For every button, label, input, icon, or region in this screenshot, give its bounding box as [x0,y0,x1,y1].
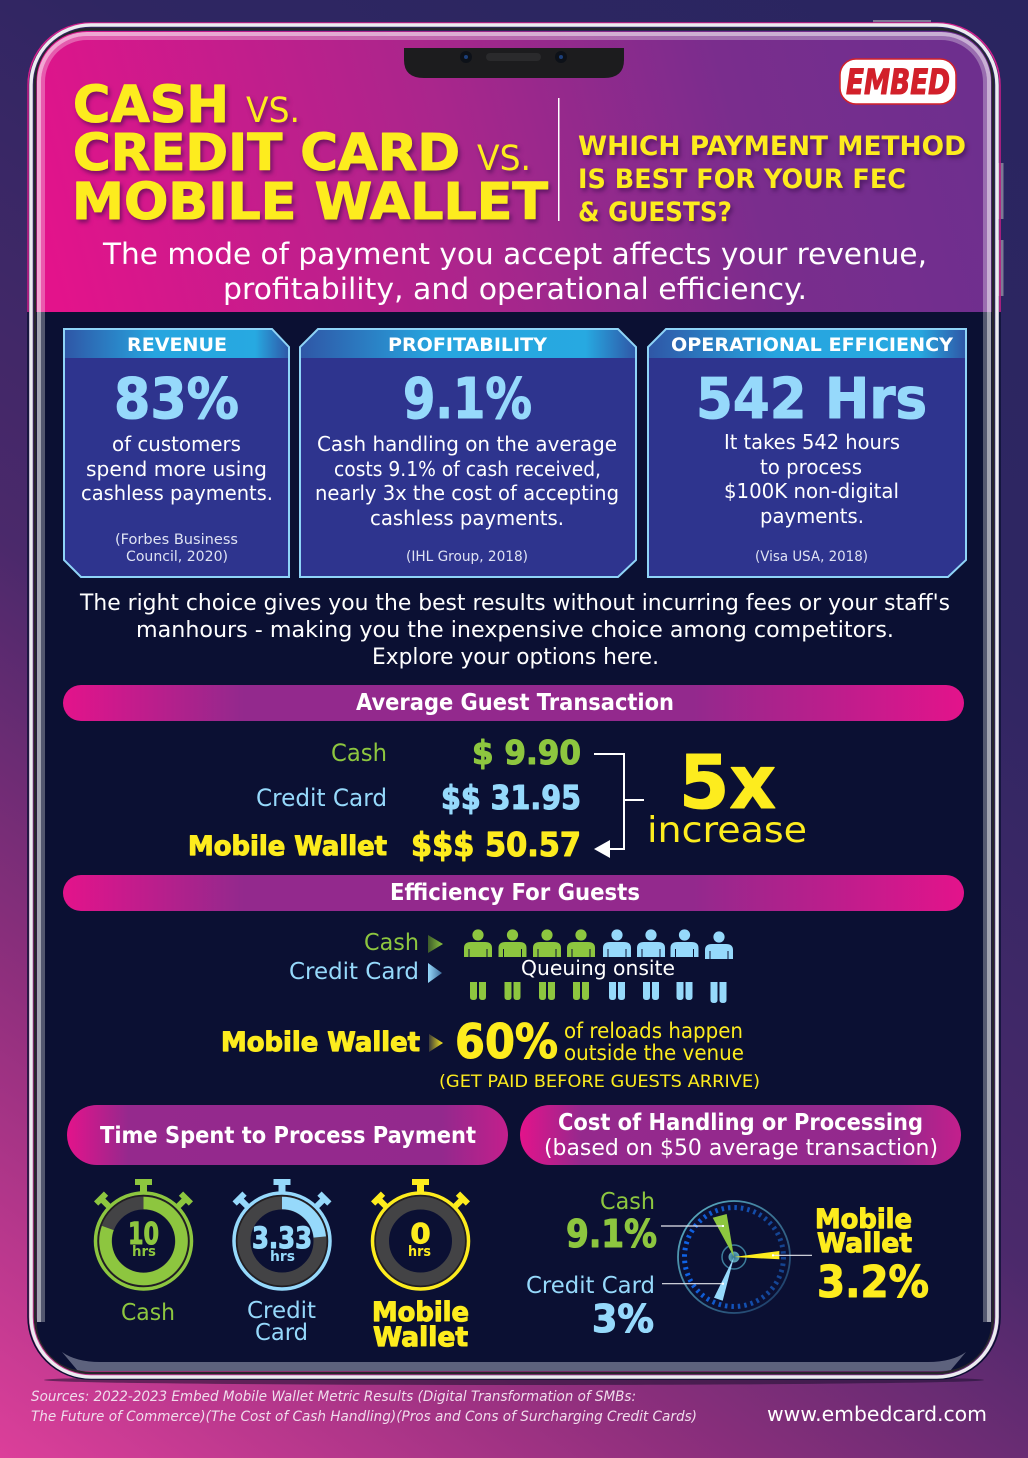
label: queuing onsite: Queuing onsite [521,956,675,980]
heading bar: average guest transaction: Average Guest Transaction [356,690,674,716]
heading pill: time spent: Time Spent to Process Payment [100,1123,476,1149]
tagline: The mode of payment you accept affects your revenue, [102,237,927,271]
sources [31,1389,697,1425]
stopwatch: cash: 10 [128,1217,159,1252]
citation: (Forbes Business [115,532,238,548]
body text: cashless payments. [81,481,273,505]
cost labels: credit card: Credit Card [526,1273,655,1299]
title divider [558,98,560,221]
heading: operational efficiency: OPERATIONAL EFFICIENCY [671,334,953,356]
heading pill: cost of handling: (based on $50 average transaction) [544,1135,938,1161]
stat: 60%: 60% [455,1015,558,1070]
panel: revenue [64,329,289,577]
body text [81,432,273,505]
stopwatch: mobile wallet: hrs [408,1244,431,1260]
body text: of customers [112,432,241,456]
title: CASH [73,76,229,135]
row: mobile wallet reloads: outside the venue [564,1041,744,1065]
title: VS. [246,91,300,131]
subtitle question: & GUESTS? [578,197,732,228]
citation: (IHL Group, 2018) [406,549,528,565]
cost labels: cash [566,1189,657,1256]
leader lines [661,1225,812,1285]
title: VS. [477,139,531,179]
body text: spend more using [86,457,267,481]
stopwatch: credit card: Card [255,1320,308,1346]
stat: 83%: 83% [114,367,239,432]
row: mobile wallet reloads: (GET PAID BEFORE GUESTS ARRIVE) [439,1072,760,1092]
cost labels: credit card [526,1273,655,1341]
row: credit card: Credit Card [256,784,387,812]
side buttons [873,20,1004,296]
heading pill: cost of handling: Cost of Handling or Processing [558,1110,923,1136]
panel: operational efficiency [648,329,966,577]
body text: It takes 542 hours [724,430,900,454]
body text: Cash handling on the average [317,432,617,456]
body text: to process [760,455,862,479]
notch [404,48,624,78]
intro paragraph [79,590,950,670]
body text: cashless payments. [370,506,564,530]
heading pill: time spent [67,1105,508,1165]
stopwatch: credit card: Credit [247,1298,316,1324]
logo: EMBED [840,59,956,104]
tagline: profitability, and operational efficiency. [223,272,807,306]
logo: EMBED: EMBED [846,63,950,103]
citation [115,532,238,565]
row: mobile wallet reloads: Mobile Wallet [221,1027,420,1058]
stopwatch: cash: hrs [132,1244,156,1260]
row: mobile wallet reloads [221,1015,760,1092]
heading: revenue: REVENUE [127,334,227,356]
stopwatch: credit card: hrs [270,1249,295,1265]
title: MOBILE WALLET [72,173,548,232]
heading bar: efficiency for guests [63,875,964,911]
subtitle question: WHICH PAYMENT METHOD [578,131,966,162]
intro paragraph: The right choice gives you the best results without incurring fees or your staff's [79,590,950,616]
cost labels: mobile wallet: Mobile [815,1204,912,1235]
website url: www.embedcard.com [767,1402,987,1426]
body text: costs 9.1% of cash received, [334,457,601,481]
row: mobile wallet: Mobile Wallet [188,831,387,862]
intro paragraph: Explore your options here. [372,644,659,670]
cost labels: credit card: 3% [592,1297,654,1341]
sources: Sources: 2022-2023 Embed Mobile Wallet Metric Results (Digital Transformation of SMBs: [31,1389,636,1405]
intro paragraph: manhours - making you the inexpensive choice among competitors. [136,617,894,643]
sources: The Future of Commerce)(The Cost of Cash Handling)(Pros and Cons of Surcharging Credit Cards) [31,1409,697,1425]
heading: profitability: PROFITABILITY [388,334,547,356]
row: cash: Cash [331,739,387,767]
callout: 5x increase: increase [647,810,807,851]
row: mobile wallet: $$$ 50.57 [411,825,581,864]
heading pill: cost of handling [520,1105,961,1165]
stopwatch: mobile wallet: Mobile [372,1297,469,1328]
wedge: cash [713,1214,734,1257]
wedge: credit card [714,1257,734,1301]
transaction values [188,733,581,864]
stat: 9.1%: 9.1% [403,367,532,432]
body text [315,432,619,530]
chart: cost dial [661,1201,812,1313]
title [72,76,548,232]
tagline [102,237,927,306]
body text: nearly 3x the cost of accepting [315,481,619,505]
label: credit card: Credit Card [289,959,419,985]
row: credit card [256,778,581,817]
cost labels: cash: 9.1% [566,1212,657,1256]
body text: payments. [760,504,864,528]
label: cash: Cash [364,930,419,956]
citation: Council, 2020) [126,549,228,565]
arrow: bracket to mobile wallet [594,754,644,858]
row: credit card: $$ 31.95 [441,778,581,817]
callout: 5x increase: 5x [679,740,776,826]
stopwatch: cash: Cash [121,1300,175,1326]
subtitle question [578,131,966,228]
cost labels: mobile wallet [815,1204,929,1308]
subtitle question: IS BEST FOR YOUR FEC [578,164,906,195]
cost labels: mobile wallet: Wallet [817,1228,912,1259]
citation: (Visa USA, 2018) [755,549,868,565]
wedge: mobile wallet [734,1251,779,1259]
body text [724,430,900,528]
stopwatch: credit card [233,1179,331,1346]
row: cash [331,733,581,772]
cost labels: cash: Cash [600,1189,655,1215]
icon: queue of people [464,929,733,1003]
stopwatch: mobile wallet [371,1179,470,1353]
stopwatch: mobile wallet: Wallet [373,1322,468,1353]
stopwatch: mobile wallet: 0 [410,1217,430,1250]
panel: profitability [300,329,636,577]
phone shadow [44,1375,984,1385]
stopwatch: credit card: 3.33 [252,1221,312,1255]
stopwatch: cash [94,1179,193,1326]
title: CREDIT CARD [73,124,460,183]
row: mobile wallet [188,825,581,864]
row: mobile wallet reloads: of reloads happen [564,1019,743,1043]
cost labels: mobile wallet: 3.2% [817,1257,929,1308]
row: cash: $ 9.90 [472,733,581,772]
stat: 542 Hrs: 542 Hrs [696,367,927,432]
body text: $100K non-digital [724,479,899,503]
callout: 5x increase [647,740,807,851]
heading bar: average guest transaction [63,685,964,721]
heading bar: efficiency for guests: Efficiency For Guests [390,880,640,906]
